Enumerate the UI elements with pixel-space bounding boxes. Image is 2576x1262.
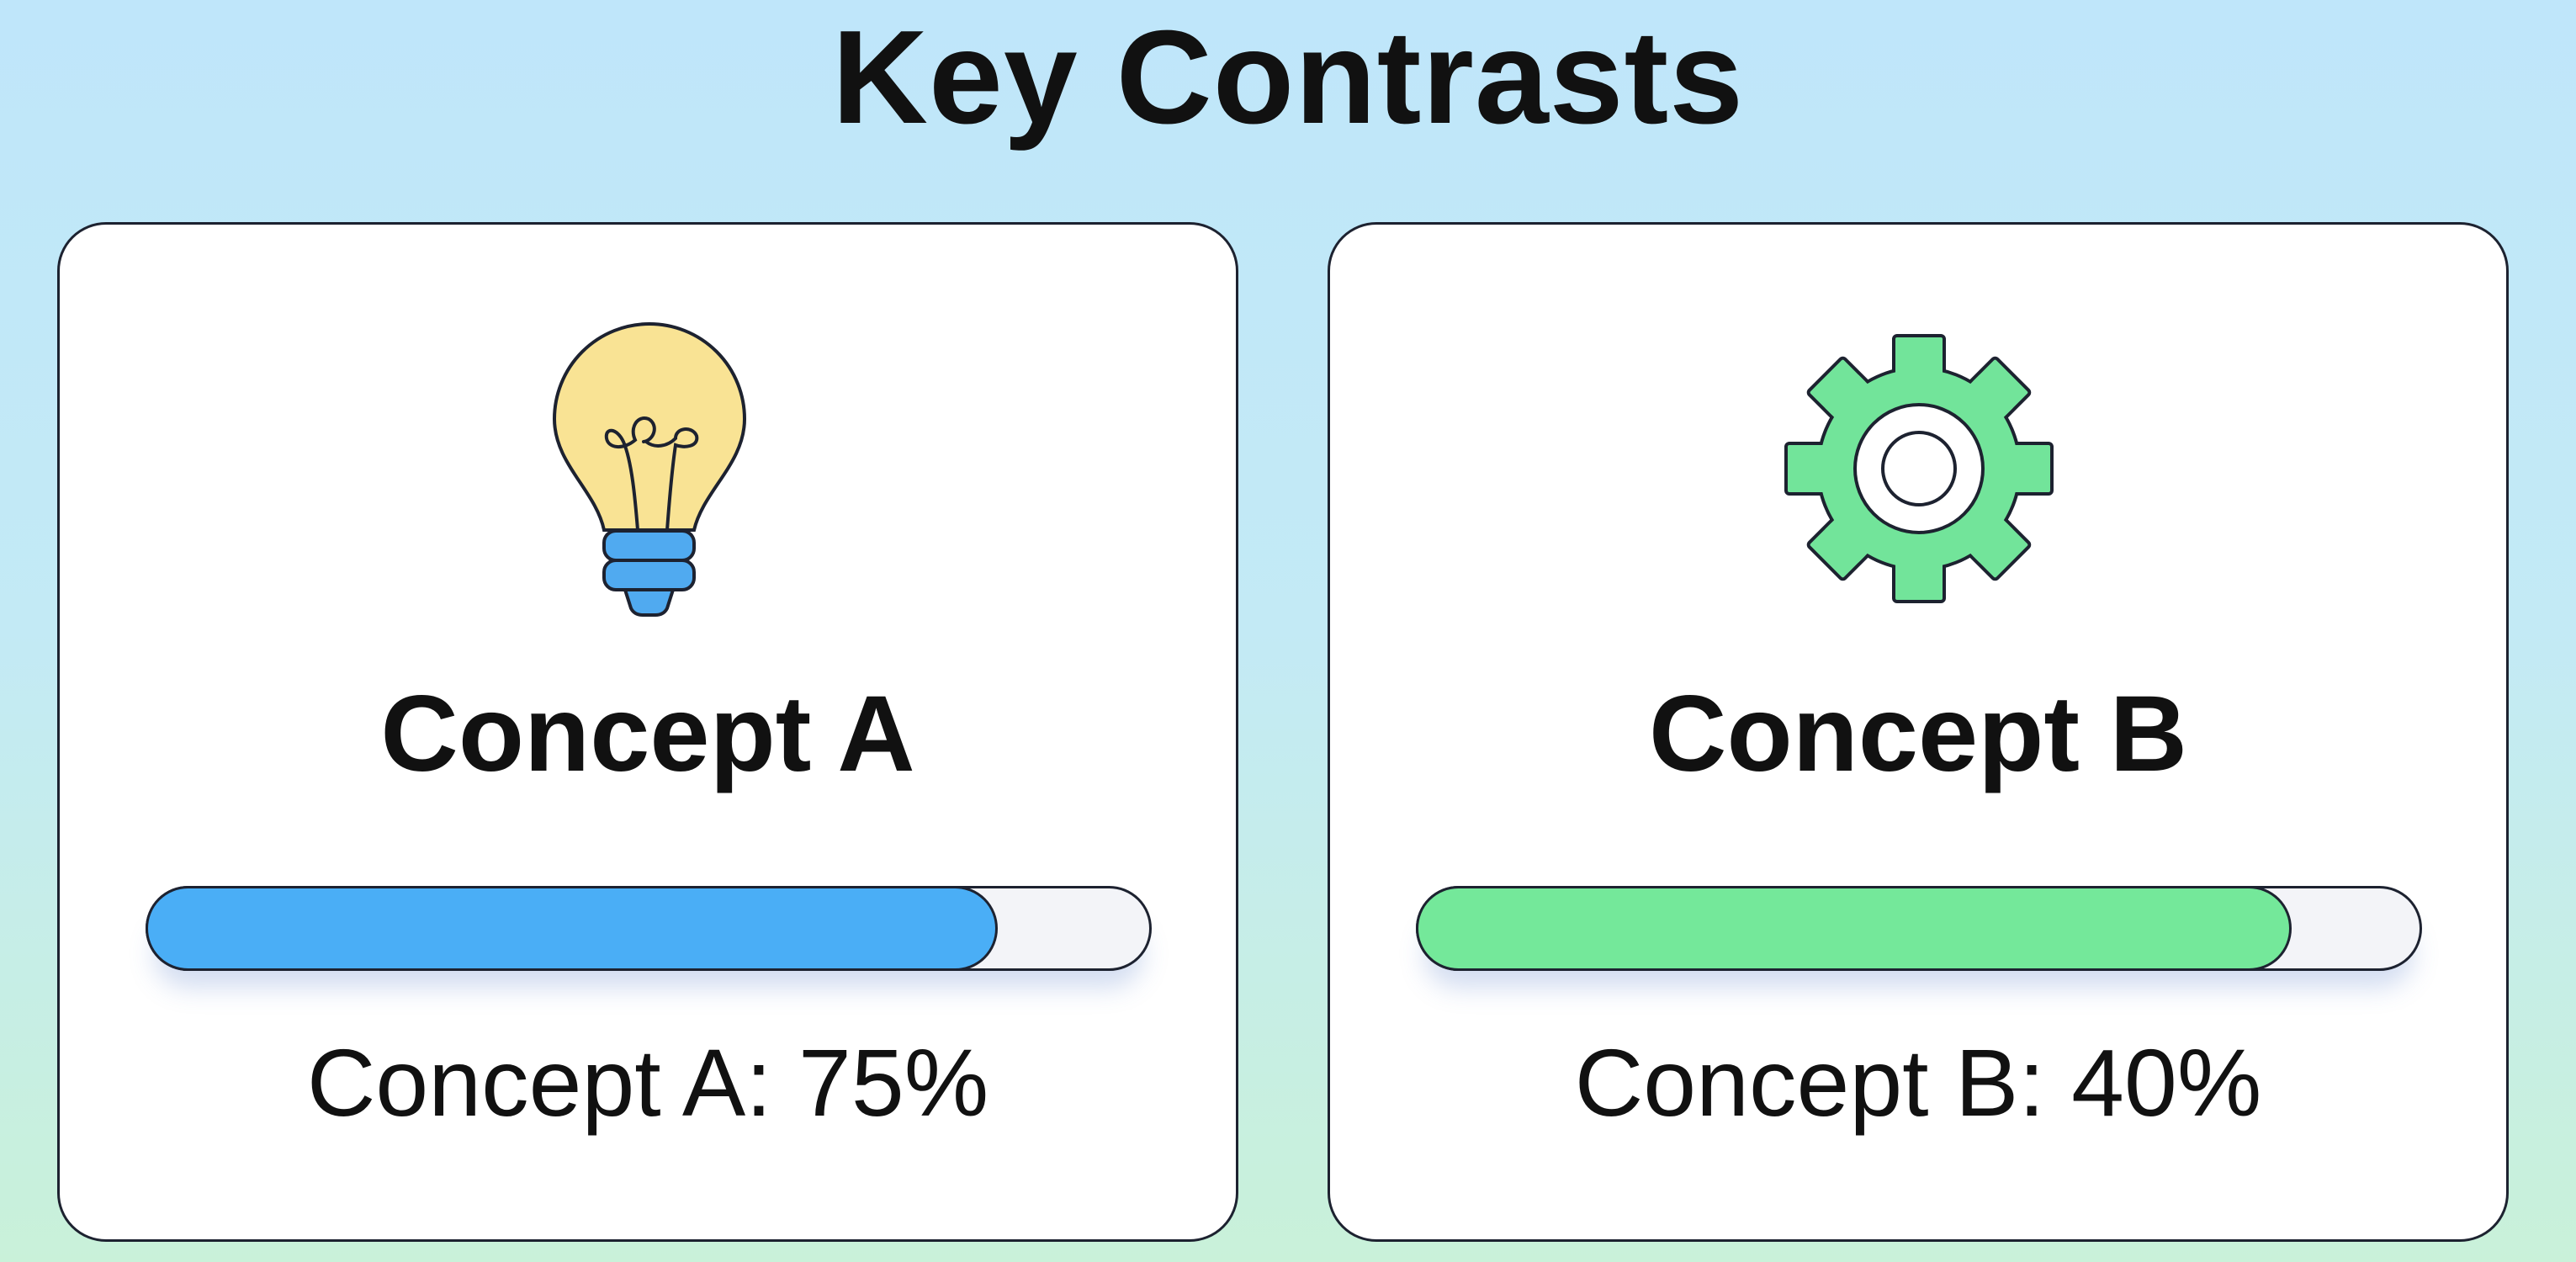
heading: concept B: Concept B	[1649, 674, 2187, 794]
panel: concept B	[1328, 222, 2509, 1242]
icon: light bulb	[553, 322, 746, 617]
progress bar A 75%	[146, 886, 1152, 971]
label A: Concept A: 75%	[307, 1030, 989, 1136]
heading: concept A: Concept A	[380, 674, 915, 794]
panel: concept A	[57, 222, 1238, 1242]
label B: Concept B: 40%	[1575, 1030, 2261, 1136]
title: Key Contrasts	[832, 3, 1744, 151]
icon: gear	[1784, 334, 2054, 603]
progress bar B 40%	[1416, 886, 2422, 971]
